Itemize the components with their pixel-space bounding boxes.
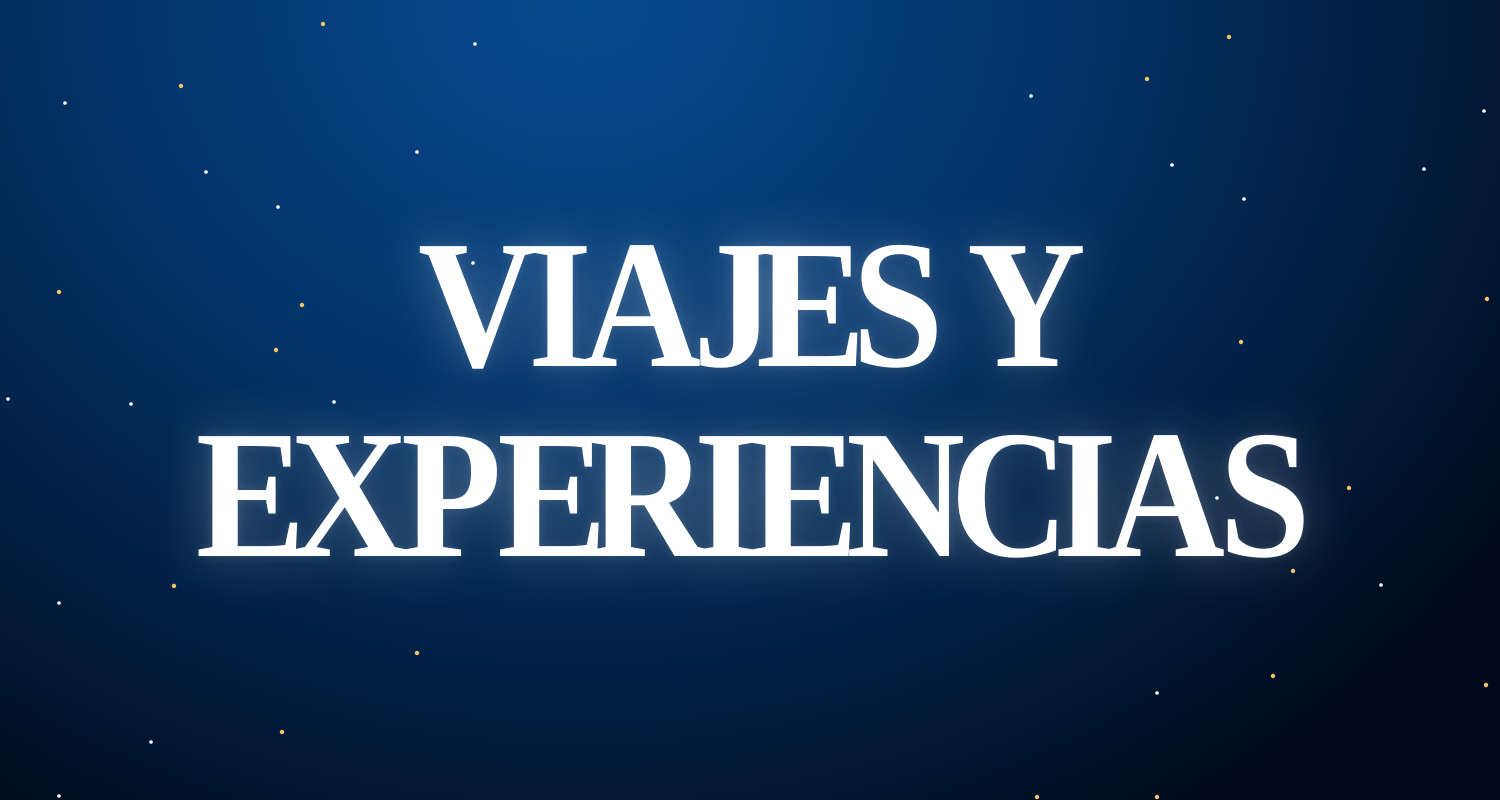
title line 1: VIAJES Y — [418, 203, 1086, 406]
title — [196, 203, 1311, 596]
title line 2: EXPERIENCIAS — [196, 393, 1311, 596]
